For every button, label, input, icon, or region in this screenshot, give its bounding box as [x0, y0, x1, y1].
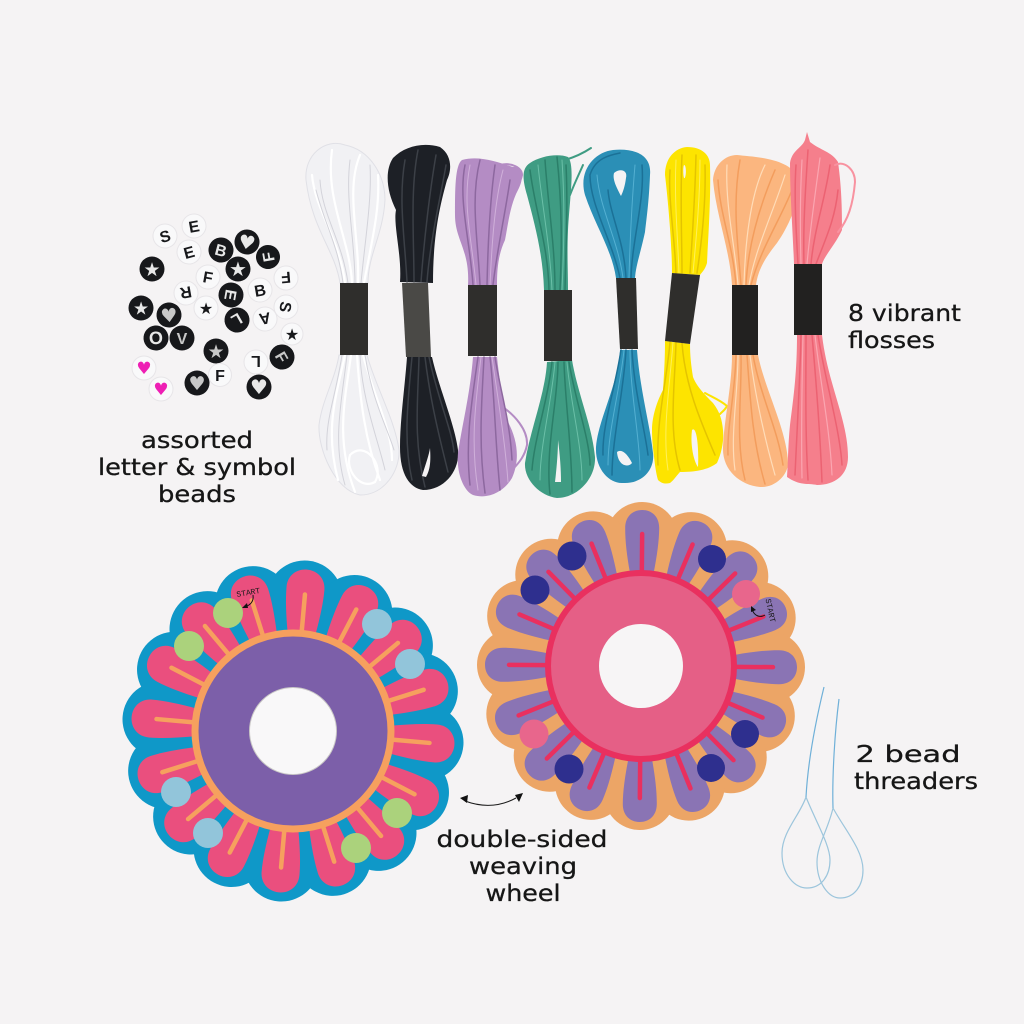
beads: assorted letter and symbol beads: ♥: [136, 359, 152, 379]
wheel B dots: [520, 542, 760, 784]
orange scalloped outer petals: [475, 500, 807, 832]
centre hole: [250, 688, 336, 774]
floss: black: [388, 145, 458, 490]
beads: assorted letter and symbol beads: A: [257, 308, 272, 327]
label: double-sided weaving wheel: weaving: [469, 854, 577, 880]
beads: assorted letter and symbol beads: ♥: [188, 373, 206, 395]
beads: assorted letter and symbol beads: E: [188, 218, 201, 237]
label: assorted letter & symbol beads: assorted: [141, 428, 253, 454]
label: 8 vibrant flosses: [848, 301, 961, 354]
bead threaders: [782, 687, 863, 898]
beads: assorted letter and symbol beads: F: [260, 250, 279, 263]
label: 8 vibrant flosses: flosses: [848, 328, 935, 354]
beads: assorted letter and symbol beads: ★: [133, 298, 149, 320]
orange petal lines: [157, 595, 429, 867]
floss: purple: [455, 158, 527, 496]
floss: yellow: [652, 147, 727, 484]
beads: assorted letter and symbol beads: ★: [199, 299, 213, 318]
beads: assorted letter and symbol beads: E: [182, 244, 197, 263]
beads: assorted letter and symbol beads: ★: [143, 259, 161, 281]
label: 2 bead threaders: threaders: [854, 769, 978, 795]
floss: orange: [713, 155, 799, 487]
start marker wheel B: START: [763, 598, 776, 624]
purple centre disc with orange ring: [195, 633, 391, 829]
start marker wheel A: [236, 587, 261, 608]
floss band: [468, 285, 497, 356]
crimson petal lines: [509, 534, 773, 798]
label: assorted letter & symbol beads: beads: [158, 482, 236, 508]
centre hole: [599, 624, 683, 708]
floss band: [794, 264, 822, 335]
label: double-sided weaving wheel: wheel: [486, 881, 560, 907]
beads: assorted letter and symbol beads: S: [158, 228, 173, 247]
floss band: [544, 290, 572, 361]
pink centre disc with crimson ring: [548, 573, 734, 759]
beads: assorted letter and symbol beads: ★: [207, 341, 225, 363]
beads: assorted letter and symbol beads: S: [275, 300, 294, 314]
label: double-sided weaving wheel: double-sided: [436, 827, 608, 853]
label: assorted letter & symbol beads: [98, 428, 296, 508]
floss: blue: [583, 150, 653, 483]
beads: assorted letter and symbol beads: F: [271, 349, 291, 366]
floss: green: [524, 148, 595, 498]
beads: assorted letter and symbol beads: O: [148, 327, 164, 349]
beads: assorted letter and symbol beads: ♥: [153, 380, 169, 400]
floss band: [665, 273, 700, 344]
beads: assorted letter and symbol beads: R: [178, 282, 193, 301]
wheel A dots: [161, 598, 425, 863]
beads: assorted letter and symbol beads: F: [201, 269, 214, 288]
beads: assorted letter and symbol beads: B: [213, 242, 228, 261]
floss: pink: [787, 132, 855, 485]
floss band: [732, 285, 758, 355]
floss band: [340, 283, 368, 355]
start marker wheel A: START: [236, 587, 261, 600]
beads: assorted letter and symbol beads: ♥: [160, 304, 179, 328]
blue scalloped outer petals: [118, 556, 468, 906]
beads: assorted letter and symbol beads: V: [177, 331, 188, 348]
label: double-sided weaving wheel: [436, 827, 608, 907]
beads: assorted letter and symbol beads: ♥: [250, 375, 268, 399]
beads: assorted letter and symbol beads: B: [253, 282, 267, 301]
beads: assorted letter and symbol beads: F: [215, 368, 225, 385]
purple inner petals: [485, 510, 797, 822]
label: 8 vibrant flosses: 8 vibrant: [848, 301, 961, 327]
pink inner petals: [130, 568, 456, 894]
double-headed arrow between wheels: [460, 793, 523, 805]
beads: assorted letter and symbol beads: L: [251, 352, 261, 369]
label: 2 bead threaders: 2 bead: [856, 742, 960, 768]
floss: white: [306, 143, 399, 495]
beads: assorted letter and symbol beads: L: [228, 309, 245, 329]
beads: assorted letter and symbol beads: E: [220, 288, 239, 302]
weaving wheel: side A blue and pink: [118, 556, 468, 906]
floss band: [402, 283, 431, 357]
beads: assorted letter and symbol beads: ★: [229, 257, 247, 281]
weaving wheel: side B orange and purple: [475, 500, 807, 832]
label: assorted letter & symbol beads: letter & symbol: [98, 455, 296, 481]
beads: assorted letter and symbol beads: [128, 212, 303, 401]
beads: assorted letter and symbol beads: ★: [285, 325, 299, 344]
start marker wheel B: [751, 598, 776, 624]
floss band: [616, 278, 638, 349]
label: 2 bead threaders: [854, 742, 978, 795]
beads: assorted letter and symbol beads: F: [280, 268, 291, 285]
beads: assorted letter and symbol beads: ♥: [237, 231, 257, 255]
